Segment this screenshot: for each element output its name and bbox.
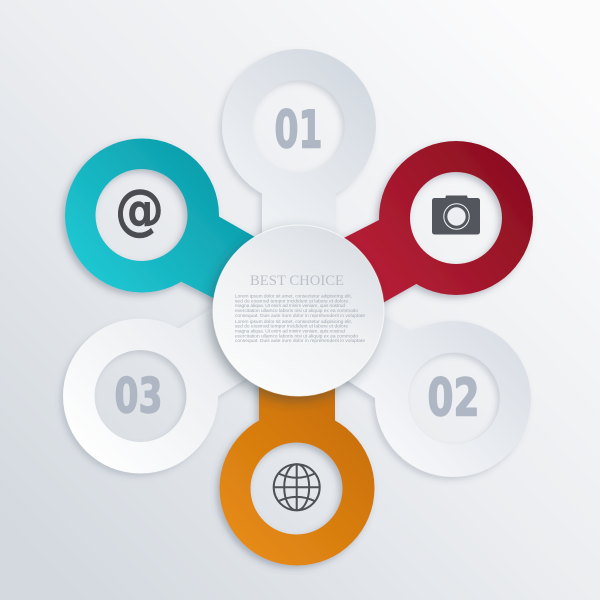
body text: Lorem ipsum dolor sit amet, consectetur adipisicing elit, bbox=[235, 319, 352, 325]
body text bbox=[235, 294, 365, 344]
ring shape teal bbox=[65, 138, 262, 308]
body text: exercitation ullamco laboris nisi ut aliquip ex ea commodo bbox=[235, 333, 358, 339]
panel: center circle bbox=[213, 225, 384, 396]
center disc bbox=[213, 225, 384, 396]
panel: 03 white ring bbox=[63, 300, 275, 474]
ring shape 01 bbox=[222, 49, 376, 245]
ring shape 02 bbox=[320, 296, 531, 477]
number 02: 02 bbox=[428, 368, 480, 428]
icon: globe bbox=[274, 464, 320, 510]
panel: 02 light ring bbox=[320, 296, 531, 477]
panel: red ring with camera bbox=[330, 141, 533, 313]
body text: sed do eiusmod tempor incididunt ut labore et dolore bbox=[235, 324, 348, 330]
heading: BEST CHOICE bbox=[250, 273, 344, 289]
body text: magna aliqua. Ut enim ad minim veniam, quis nostrud bbox=[235, 303, 345, 309]
number 03: 03 bbox=[114, 368, 162, 424]
icon: at sign: @ bbox=[115, 178, 164, 242]
body text: consequat. Duis aute irure dolor in reprehenderit in voluptate bbox=[235, 338, 365, 344]
body text: consequat. Duis aute irure dolor in reprehenderit in voluptate bbox=[235, 313, 365, 319]
ring shape 03 bbox=[63, 300, 275, 474]
ring shape red bbox=[330, 141, 533, 313]
icon: camera bbox=[432, 196, 480, 234]
number 01: 01 bbox=[274, 100, 322, 160]
body text: sed do eiusmod tempor incididunt ut labore et dolore bbox=[235, 298, 348, 304]
body text: magna aliqua. Ut enim ad minim veniam, quis nostrud bbox=[235, 328, 345, 334]
body text: exercitation ullamco laboris nisi ut aliquip ex ea commodo bbox=[235, 308, 358, 314]
panel: orange ring with globe bbox=[220, 375, 374, 566]
panel: 01 light ring bbox=[222, 49, 376, 245]
panel: teal ring with at sign bbox=[65, 138, 262, 308]
ring shape orange bbox=[220, 375, 374, 566]
body text: Lorem ipsum dolor sit amet, consectetur adipisicing elit, bbox=[235, 294, 352, 300]
